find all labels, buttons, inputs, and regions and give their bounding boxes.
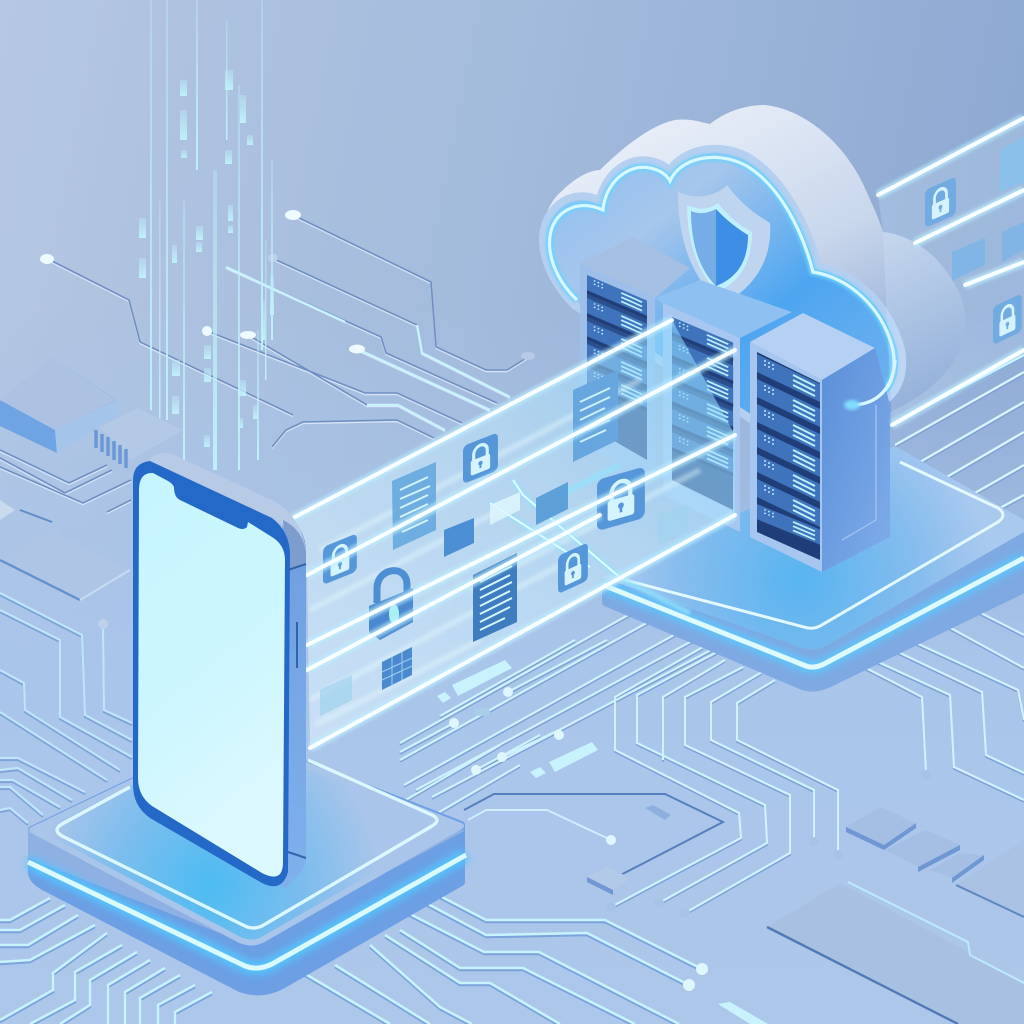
- pad: left: [0, 500, 52, 522]
- phone side: [270, 515, 306, 888]
- document: dark: [473, 553, 517, 642]
- cloud platform: [602, 446, 1024, 689]
- cloud back extrusion: [543, 105, 965, 420]
- card: blue: [444, 518, 474, 557]
- card: grid: [382, 647, 412, 690]
- right side data cards: [952, 137, 1024, 281]
- circuit traces: under phone platform: [0, 895, 702, 1024]
- phone: [133, 453, 306, 888]
- trace nodes: bottom: [98, 619, 931, 991]
- cloud neon outline: [550, 157, 894, 405]
- server rack: left: [580, 237, 690, 480]
- padlock: 3D: [369, 571, 413, 640]
- right beam haze: [878, 118, 1024, 425]
- bottom pads: [587, 805, 984, 895]
- octagon traces: [464, 794, 723, 880]
- cloud rim: [547, 153, 898, 420]
- flat panel: right: [956, 840, 1024, 917]
- server rack: right: [750, 313, 890, 572]
- chip: left: [0, 357, 119, 453]
- document: light: [392, 462, 436, 550]
- connector glow: [490, 465, 690, 613]
- light bars: [437, 660, 768, 1024]
- cloud neon halo: [550, 157, 894, 405]
- beams: glow: [293, 118, 1024, 748]
- pale block: [490, 492, 520, 525]
- beams: light streaks: [293, 118, 1024, 748]
- server rack: middle: [655, 280, 792, 532]
- connector lines: [490, 480, 623, 580]
- circuit traces: right of cloud: [895, 355, 1024, 510]
- cloud front face: [547, 153, 898, 420]
- phone bezel: [133, 461, 290, 886]
- lock tiles: [323, 176, 1022, 594]
- data rain column: [139, 0, 274, 470]
- circuit traces: lower left: [0, 593, 132, 825]
- cloud glow tail: [844, 360, 895, 410]
- shield: [678, 185, 770, 305]
- phone screen: [138, 473, 285, 877]
- trace highlights: [226, 267, 510, 430]
- card: teal: [536, 482, 568, 525]
- flat panel: left: [0, 530, 130, 600]
- document: upper right of band: [573, 370, 618, 462]
- circuit traces: upper left: [0, 215, 528, 513]
- trace nodes: [40, 210, 535, 360]
- chip: small with pins: [96, 408, 183, 468]
- phone top edge: [150, 453, 306, 555]
- flat panel: bottom right: [767, 882, 1024, 1024]
- card: pale: [320, 505, 688, 716]
- cloud: [543, 105, 965, 420]
- haze streaks: [310, 380, 700, 725]
- side band and button: [288, 564, 306, 858]
- phone platform: [28, 735, 466, 991]
- circuit traces: centre: [320, 600, 1024, 915]
